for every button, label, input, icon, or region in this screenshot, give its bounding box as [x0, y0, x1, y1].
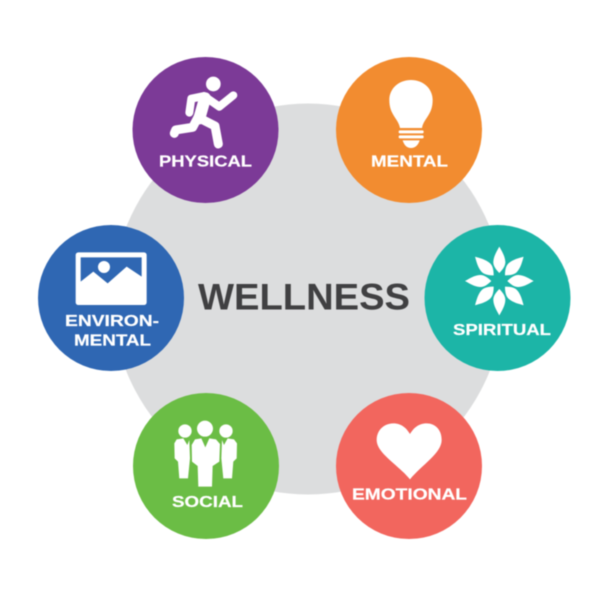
label: environ-: ENVIRON-	[65, 313, 159, 330]
label: emotional: EMOTIONAL	[352, 486, 467, 503]
label: social: SOCIAL	[172, 494, 243, 511]
label: mental: MENTAL	[371, 154, 448, 171]
panel: physical	[132, 57, 278, 203]
icon: heart	[377, 423, 442, 479]
icon: people	[174, 421, 237, 487]
panel: mental	[336, 57, 482, 203]
panel: environmental	[38, 225, 184, 371]
panel: spiritual	[424, 225, 570, 371]
panel: emotional	[336, 393, 482, 539]
central grey circle	[112, 104, 504, 494]
icon: landscape picture	[76, 252, 147, 305]
label: spiritual: SPIRITUAL	[453, 322, 551, 339]
icon: runner	[174, 77, 233, 144]
icon: flower	[465, 247, 534, 315]
icon: light bulb	[389, 80, 433, 148]
title: WELLNESS: WELLNESS	[198, 276, 410, 318]
label: mental: MENTAL	[74, 332, 151, 350]
label: physical: PHYSICAL	[159, 154, 252, 171]
panel: social	[133, 393, 279, 539]
